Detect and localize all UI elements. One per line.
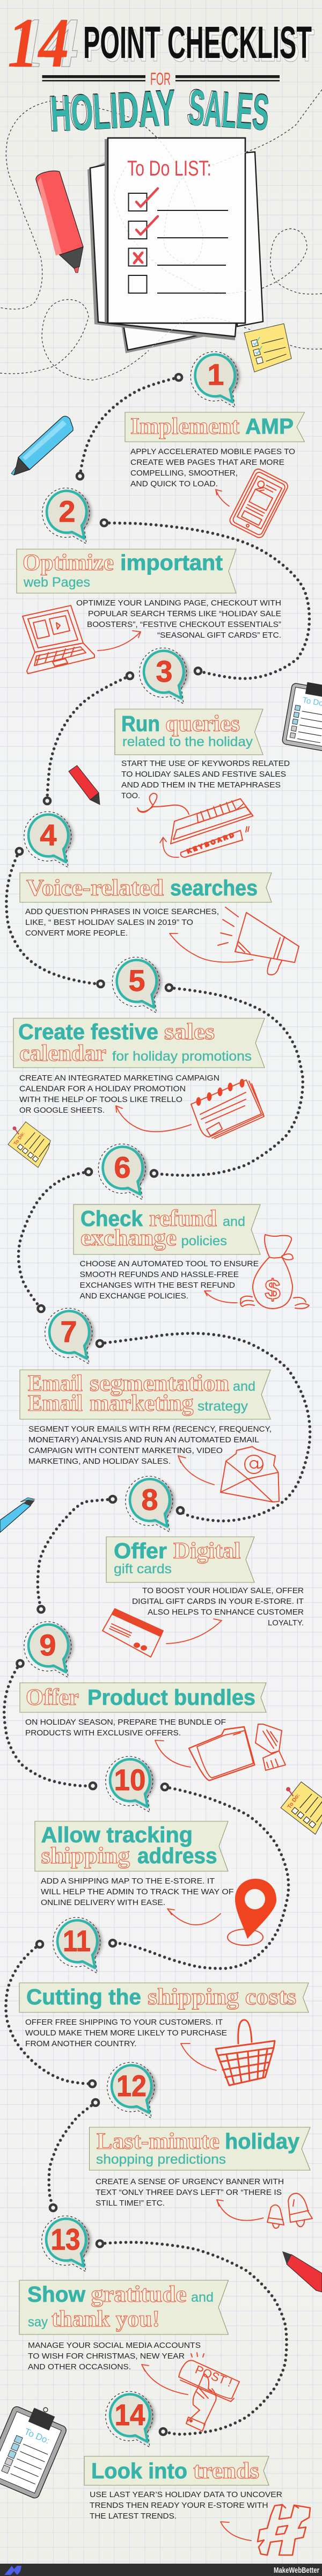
text: step 3 description: TO HOLIDAY SALES AND FESTIVE SALES xyxy=(121,770,286,779)
text: step 8 description: LOYALTY. xyxy=(268,1619,304,1628)
banner: show gratitude and say thank you xyxy=(19,2280,229,2334)
icon: keyboard xyxy=(137,793,253,857)
bubble number 8: 8 xyxy=(141,1483,158,1516)
route dots 7 to 8 xyxy=(97,1333,310,1521)
banner: create festive sales calendar xyxy=(13,1018,265,1068)
banner: implement amp xyxy=(125,412,305,442)
banner: voice-related searches xyxy=(20,873,272,902)
back paper bottom xyxy=(121,325,209,353)
banner: show gratitude and say thank you: and xyxy=(191,2290,214,2305)
text: step 3 description: TOO. xyxy=(121,792,140,800)
arrow: to step 11 text xyxy=(181,2044,216,2070)
route dots 13 to 14 xyxy=(97,2241,287,2435)
step 12 xyxy=(89,2062,322,2292)
icon: credit card xyxy=(103,1609,163,1657)
arrow: to step 5 text xyxy=(116,1106,191,1132)
route dots 10 to 11 xyxy=(109,1784,289,1968)
icon: map pin xyxy=(228,1879,276,1945)
banner: create festive sales calendar: Create festive xyxy=(18,1019,158,1044)
route dots 3 to 4 xyxy=(44,673,133,804)
title: 14: 14 xyxy=(13,3,79,82)
checklist row 3 xyxy=(129,248,226,266)
text: step 5 description xyxy=(19,1074,219,1115)
banner: optimize important web pages: web Pages xyxy=(23,575,90,590)
banner: offer digital gift cards: Digital xyxy=(173,1538,241,1564)
back paper left xyxy=(87,161,235,340)
text: step 2 description: BOOSTERS”, “FESTIVE CHECKOUT ESSENTIALS” xyxy=(87,621,281,629)
icon: laptop xyxy=(23,605,94,674)
step 9 xyxy=(20,1622,286,1780)
icon: red marker xyxy=(36,171,83,273)
text: step 7 description: MONETARY) ANALYSIS AND RUN AN AUTOMATED EMAIL xyxy=(28,1436,259,1444)
bubble number 6 xyxy=(98,1144,148,1200)
text: step 2 description: “SEASONAL GIFT CARDS” ETC. xyxy=(157,631,281,640)
text: step 1 description: APPLY ACCELERATED MOBILE PAGES TO xyxy=(130,448,295,456)
banner: offer digital gift cards xyxy=(106,1537,254,1582)
banner: voice-related searches: searches xyxy=(170,875,258,900)
banner: last-minute holiday shopping predictions xyxy=(89,2127,310,2170)
arrow: to step 6 text xyxy=(204,1291,237,1303)
banner: offer product bundles xyxy=(20,1683,266,1712)
route dots 6 to 7 xyxy=(18,1169,92,1312)
step 1 xyxy=(125,352,305,539)
banner: look into trends xyxy=(84,2456,269,2485)
for rule xyxy=(42,69,280,89)
bubble number 9: 9 xyxy=(39,1628,56,1662)
banner: last-minute holiday shopping predictions: Last-minute xyxy=(97,2129,219,2154)
text: step 4 description: LIKE, “ BEST HOLIDAY SALES IN 2019” TO xyxy=(25,918,193,927)
banner: show gratitude and say thank you: thank you! xyxy=(52,2307,160,2332)
banner: implement amp: AMP xyxy=(245,414,294,439)
banner: cutting the shipping costs xyxy=(19,1983,309,2012)
banner: check refund and exchange policies: Check xyxy=(80,1206,143,1231)
banner: offer digital gift cards: gift cards xyxy=(114,1561,172,1577)
icon: hashtag xyxy=(258,2505,310,2555)
text: step 1 description: AND QUICK TO LOAD. xyxy=(130,480,218,488)
banner: last-minute holiday shopping predictions: shopping predictions xyxy=(96,2152,226,2167)
arrow: to step 2 text xyxy=(98,631,141,651)
bubble number 11 xyxy=(53,1917,103,1973)
icon: clipboard left xyxy=(0,2396,71,2499)
step 8 xyxy=(103,1476,304,1657)
banner: offer product bundles: Offer xyxy=(26,1685,79,1710)
banner: run queries: Run xyxy=(121,711,160,736)
icon: keyboard: KEYBOARD xyxy=(186,832,235,855)
banner: implement amp: Implement xyxy=(130,414,240,439)
arrow: to step 13 text xyxy=(142,2365,188,2395)
bubble number 9 xyxy=(24,1622,74,1677)
text: step 7 description: CAMPAIGN WITH CONTENT MARKETING, VIDEO xyxy=(28,1447,223,1455)
icon: red marker three xyxy=(282,2251,322,2292)
text: step 11 description xyxy=(25,2018,227,2048)
bubble number 5: 5 xyxy=(128,964,145,997)
route dots 5 to 6 xyxy=(151,984,303,1177)
checklist row 4 xyxy=(129,275,226,294)
text: step 1 description xyxy=(130,448,295,488)
text: step 13 description: MANAGE YOUR SOCIAL MEDIA ACCOUNTS xyxy=(28,2341,201,2350)
route dots 2 to 3 xyxy=(101,520,309,678)
arrow: to step 8 text xyxy=(166,1619,222,1644)
checklist row 1 xyxy=(129,188,228,211)
text: step 9 description: ON HOLIDAY SEASON, PREPARE THE BUNDLE OF xyxy=(25,1718,226,1727)
route dots 4 to 5 xyxy=(6,848,104,987)
text: step 14 description: USE LAST YEAR’S HOLIDAY DATA TO UNCOVER xyxy=(90,2491,282,2499)
bubble number 7 xyxy=(45,1308,94,1364)
icon: small red marker xyxy=(69,765,100,805)
banner: check refund and exchange policies: exchange xyxy=(80,1225,177,1251)
bubble number 3 xyxy=(140,648,189,704)
step 4 xyxy=(20,812,299,975)
icon: megaphone xyxy=(218,907,299,975)
banner: email segmentation and email marketing strategy: Email xyxy=(28,1391,83,1416)
banner: run queries: queries xyxy=(165,711,240,736)
arrow: to step 1 text xyxy=(216,490,229,506)
text: step 8 description: ALSO HELPS TO ENHANCE CUSTOMER xyxy=(148,1608,304,1617)
step 5 xyxy=(8,957,265,1167)
arrow: to step 4 text xyxy=(170,933,253,962)
bubble number 4 xyxy=(24,812,74,867)
text: step 10 description: ADD A SHIPPING MAP TO THE E-STORE. IT xyxy=(41,1877,215,1886)
route dots 9 to 10 xyxy=(4,1660,96,1789)
bubble number 12 xyxy=(107,2062,157,2118)
text: step 7 description xyxy=(28,1425,272,1466)
bubble number 14: 14 xyxy=(115,2398,145,2432)
text: step 2 description: POPULAR SEARCH TERMS LIKE “HOLIDAY SALE xyxy=(88,610,281,618)
text: step 11 description: WOULD MAKE THEM MORE LIKELY TO PURCHASE xyxy=(25,2029,227,2038)
banner: cutting the shipping costs: shipping costs xyxy=(148,1984,296,2010)
text: step 6 description: SMOOTH REFUNDS AND HASSLE-FREE xyxy=(79,1271,239,1279)
main paper xyxy=(105,139,109,323)
banner: allow tracking shipping address: Allow tracking xyxy=(41,1822,193,1847)
bubble number 3: 3 xyxy=(156,654,173,688)
arrow: to step 7 text xyxy=(178,1456,214,1485)
text: step 6 description xyxy=(79,1260,259,1301)
text: step 12 description: TEXT “ONLY THREE DAYS LEFT” OR “THERE IS xyxy=(96,2188,282,2197)
icon: clipboard right xyxy=(282,680,322,753)
banner: email segmentation and email marketing strategy: Email xyxy=(28,1371,83,1396)
text: step 6 description: AND EXCHANGE POLICIES. xyxy=(79,1292,188,1301)
title xyxy=(8,3,314,142)
icon: money bag: $ xyxy=(265,1274,281,1305)
text: step 10 description: ONLINE DELIVERY WITH EASE. xyxy=(41,1899,165,1907)
text: step 1 description: CREATE WEB PAGES THAT ARE MORE xyxy=(130,458,284,467)
text: step 3 description: START THE USE OF KEYWORDS RELATED xyxy=(121,760,290,768)
banner: check refund and exchange policies xyxy=(74,1205,260,1254)
icon: email envelope xyxy=(221,1447,279,1502)
bubble number 1 xyxy=(191,352,240,407)
text: step 2 description xyxy=(76,599,281,640)
footer logo xyxy=(4,2566,21,2575)
back paper right xyxy=(236,152,263,326)
bubble number 8 xyxy=(126,1476,175,1532)
footer bar xyxy=(0,2564,322,2576)
banner: allow tracking shipping address: address xyxy=(137,1843,217,1868)
bubble number 6: 6 xyxy=(114,1150,131,1184)
step 3 xyxy=(69,648,322,857)
bubble number 10 xyxy=(106,1756,155,1812)
bubble number 14 xyxy=(106,2391,155,2447)
banner: create festive sales calendar: sales xyxy=(164,1019,215,1045)
text: step 11 description: FROM ANOTHER COUNTRY. xyxy=(25,2040,136,2048)
text: step 14 description xyxy=(90,2491,282,2521)
icon: clipboard left: To Do: xyxy=(23,2426,51,2446)
text: step 14 description: TRENDS THEN READY YOUR E-STORE WITH xyxy=(90,2501,268,2510)
banner: email segmentation and email marketing strategy: strategy xyxy=(197,1399,248,1414)
banner: allow tracking shipping address xyxy=(35,1821,228,1871)
banner: optimize important web pages: important xyxy=(120,550,223,575)
step 13 xyxy=(19,2216,239,2431)
bubble number 12: 12 xyxy=(116,2069,147,2103)
banner: voice-related searches: Voice-related xyxy=(26,875,164,901)
bubble number 2: 2 xyxy=(58,494,76,528)
text: step 3 description: AND ADD THEM IN THE METAPHRASES xyxy=(121,781,281,790)
bubble number 4: 4 xyxy=(40,818,57,852)
banner: check refund and exchange policies: refund xyxy=(149,1206,217,1231)
step 10 xyxy=(35,1756,276,1945)
text: step 10 description: WILL HELP THE ADMIN TO TRACK THE WAY OF xyxy=(41,1888,234,1896)
text: step 9 description: PRODUCTS WITH EXCLUSIVE OFFERS. xyxy=(25,1729,181,1738)
icon: folder with papers xyxy=(189,1724,286,1780)
text: step 4 description xyxy=(25,908,219,938)
step 7 xyxy=(20,1308,279,1502)
bubble number 7: 7 xyxy=(60,1315,77,1348)
text: step 12 description: STILL TIME!” ETC. xyxy=(96,2199,165,2208)
banner: optimize important web pages xyxy=(17,549,236,593)
text: step 7 description: SEGMENT YOUR EMAILS WITH RFM (RECENCY, FREQUENCY, xyxy=(28,1425,272,1434)
bubble number 13 xyxy=(42,2216,91,2272)
to do list paper stack xyxy=(87,138,263,353)
faint dashed lines through paper xyxy=(114,138,252,349)
banner: email segmentation and email marketing strategy xyxy=(20,1370,270,1419)
text: step 8 description: DIGITAL GIFT CARDS IN YOUR E-STORE. IT xyxy=(132,1597,304,1606)
arrow: to step 12 text xyxy=(217,2200,264,2221)
icon: calendar xyxy=(191,1079,264,1139)
step 6 xyxy=(74,1144,309,1309)
arrow: keyboard curl xyxy=(160,837,179,857)
banner: last-minute holiday shopping predictions: holiday xyxy=(225,2129,299,2154)
icon: pinned note xyxy=(8,1122,50,1167)
banner: look into trends: trends xyxy=(193,2458,259,2484)
text: step 13 description: TO WISH FOR CHRISTMAS, NEW YEAR xyxy=(28,2352,185,2361)
arrow: to step 14 text xyxy=(221,2522,251,2541)
banner: cutting the shipping costs: Cutting the xyxy=(26,1984,141,2009)
text: step 5 description: CALENDAR FOR A HOLIDAY PROMOTION xyxy=(19,1085,186,1093)
text: step 9 description xyxy=(25,1718,226,1738)
text: step 13 description: AND OTHER OCCASIONS. xyxy=(28,2363,131,2371)
text: step 8 description xyxy=(132,1587,304,1628)
banner: run queries xyxy=(115,709,263,755)
title: 14: 14 xyxy=(8,3,69,82)
icon: shopping basket xyxy=(216,2020,275,2085)
icon: mobile phone xyxy=(228,468,289,539)
icon: money bag xyxy=(240,1235,309,1309)
icon: yellow sticky note xyxy=(244,324,291,372)
banner: check refund and exchange policies: policies xyxy=(181,1234,227,1249)
text: step 4 description: CONVERT MORE PEOPLE. xyxy=(25,929,128,938)
banner: show gratitude and say thank you: say xyxy=(28,2315,48,2330)
banner: email segmentation and email marketing strategy: and xyxy=(233,1379,255,1394)
text: step 13 description xyxy=(28,2341,201,2371)
icon: hand post stamp xyxy=(179,2353,239,2431)
text: step 6 description: CHOOSE AN AUTOMATED TOOL TO ENSURE xyxy=(79,1260,259,1268)
route dots 12 to 13 xyxy=(49,2099,99,2211)
icon: pinned note: To Do: xyxy=(12,1131,26,1146)
bubble number 1: 1 xyxy=(207,357,224,391)
text: step 12 description: CREATE A SENSE OF URGENCY BANNER WITH xyxy=(96,2178,284,2186)
step 14 xyxy=(0,2391,310,2555)
banner: show gratitude and say thank you: gratitude xyxy=(91,2282,187,2307)
text: step 7 description: MARKETING, AND HOLIDAY SALES. xyxy=(28,1457,171,1466)
icon: pinned note right xyxy=(281,1782,322,1834)
text: step 8 description: TO BOOST YOUR HOLIDAY SALE, OFFER xyxy=(142,1587,304,1595)
bubble number 13: 13 xyxy=(50,2222,80,2256)
route dots 11 to 12 xyxy=(6,1941,96,2087)
banner: offer product bundles: Product bundles xyxy=(87,1685,255,1710)
bubble number 5 xyxy=(112,957,162,1013)
arrow: to step 9 text xyxy=(155,1740,191,1767)
text: step 14 description: THE LATEST TRENDS. xyxy=(90,2512,177,2521)
text: step 10 description xyxy=(41,1877,234,1907)
banner: run queries: related to the holiday xyxy=(122,734,253,749)
text: step 2 description: OPTIMIZE YOUR LANDING PAGE, CHECKOUT WITH xyxy=(76,599,281,608)
heading: to do list: To Do LIST: xyxy=(127,157,211,180)
text: step 5 description: WITH THE HELP OF TOOLS LIKE TRELLO xyxy=(19,1096,182,1104)
icon: blue marker xyxy=(11,416,73,475)
checklist row 2 xyxy=(129,216,228,239)
text: step 4 description: ADD QUESTION PHRASES IN VOICE SEARCHES, xyxy=(25,908,219,916)
banner: show gratitude and say thank you: Show xyxy=(27,2282,85,2307)
route dots 8 to 9 xyxy=(38,1496,116,1612)
icon: bells xyxy=(267,2193,312,2228)
text: step 12 description xyxy=(96,2178,284,2208)
banner: create festive sales calendar: for holiday promotions xyxy=(112,1049,252,1064)
banner: create festive sales calendar: calendar xyxy=(19,1041,106,1066)
banner: offer digital gift cards: Offer xyxy=(114,1538,167,1563)
bubble number 10: 10 xyxy=(114,1763,146,1797)
title: holiday sales: HOLIDAY xyxy=(49,79,177,142)
arrow: to step 10 text xyxy=(167,1909,221,1925)
route dots 1 to 2 xyxy=(77,374,182,479)
banner: optimize important web pages: Optimize xyxy=(23,550,114,575)
text: step 5 description: OR GOOGLE SHEETS. xyxy=(19,1106,105,1115)
for rule: FOR xyxy=(150,69,171,89)
title: holiday sales: HOLIDAY xyxy=(48,79,177,142)
step 2 xyxy=(17,488,281,674)
icon: hand post stamp: POST ! xyxy=(193,2362,234,2390)
banner: allow tracking shipping address: shipping xyxy=(41,1843,130,1869)
text: step 3 description xyxy=(121,760,290,800)
banner: check refund and exchange policies: and xyxy=(223,1214,245,1229)
step 11 xyxy=(19,1917,309,2085)
text: step 5 description: CREATE AN INTEGRATED MARKETING CAMPAIGN xyxy=(19,1074,219,1083)
text: step 11 description: OFFER FREE SHIPPING TO YOUR CUSTOMERS. IT xyxy=(25,2018,223,2027)
bubble number 11: 11 xyxy=(63,1924,91,1958)
text: step 1 description: COMPELLING, SMOOTHER, xyxy=(130,469,238,478)
bubble number 2 xyxy=(42,488,92,544)
text: step 6 description: EXCHANGES WITH THE BEST REFUND xyxy=(79,1281,235,1290)
banner: email segmentation and email marketing strategy: marketing xyxy=(90,1391,194,1416)
banner: look into trends: Look into xyxy=(91,2458,187,2483)
icon: pinned note right: To Do: xyxy=(287,1792,301,1810)
header dashed doodle lines xyxy=(0,90,322,380)
banner: email segmentation and email marketing strategy: segmentation xyxy=(90,1371,229,1396)
icon: blue marker two xyxy=(0,1498,35,1533)
